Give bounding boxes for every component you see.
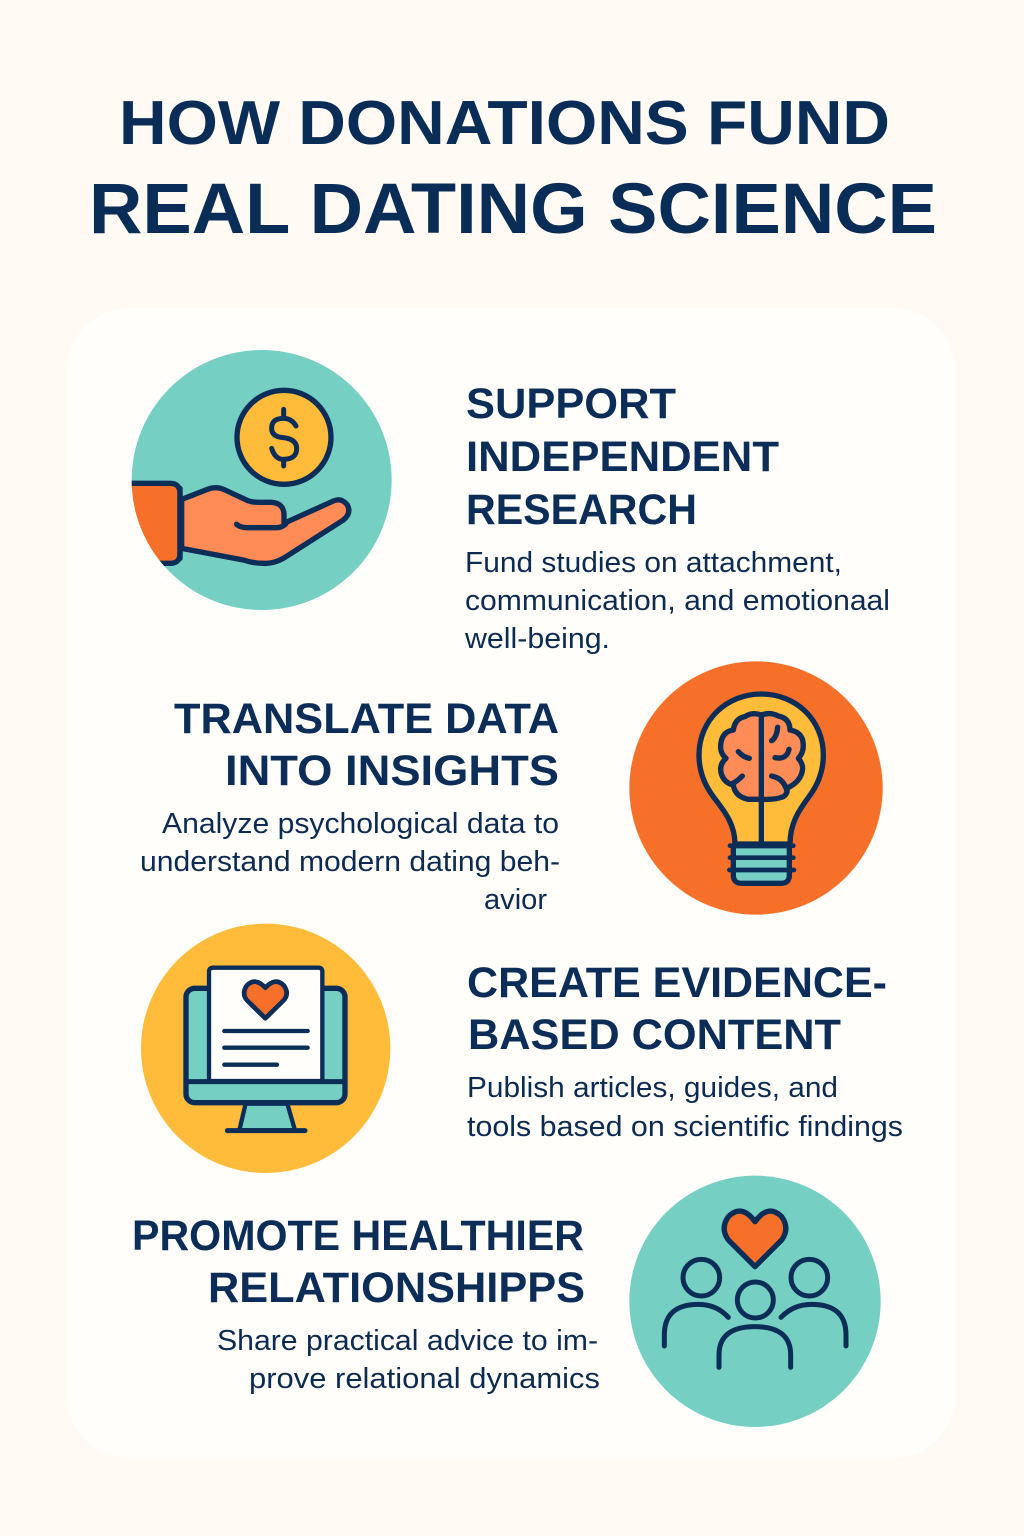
heading: create evidence-based content: CREATE EVIDENCE-	[467, 960, 887, 1007]
text: support independent research description	[464, 547, 890, 655]
heading: translate data into insights	[174, 696, 559, 795]
heading: support independent research: INDEPENDENT	[466, 434, 779, 481]
icon: three people with heart	[629, 1176, 881, 1427]
text: evidence-based content description: Publish articles, guides, and	[467, 1072, 838, 1104]
title: HOW DONATIONS FUND	[119, 88, 890, 158]
icon: light bulb with brain	[629, 661, 883, 915]
heading: support independent research	[466, 381, 779, 534]
text: translate data description: avior	[484, 884, 547, 916]
text: healthier relationships description: prove relational dynamics	[249, 1363, 600, 1395]
heading: support independent research: RESEARCH	[466, 487, 697, 534]
text: evidence-based content description: tools based on scientific findings	[467, 1111, 903, 1143]
heading: create evidence-based content	[467, 960, 887, 1059]
text: evidence-based content description	[467, 1072, 903, 1143]
text: healthier relationships description: Share practical advice to im-	[217, 1325, 598, 1357]
heading: create evidence-based content: BASED CONTENT	[468, 1012, 841, 1059]
heading: promote healthier relationships	[132, 1213, 585, 1312]
text: support independent research description: well-being.	[464, 623, 610, 655]
heading: promote healthier relationships: RELATIONSHIPPS	[208, 1265, 585, 1312]
heading: translate data into insights: TRANSLATE DATA	[174, 696, 559, 743]
icon: hand receiving a coin	[127, 350, 392, 610]
heading: promote healthier relationships: PROMOTE HEALTHIER	[132, 1213, 584, 1260]
text: support independent research description: Fund studies on attachment,	[465, 547, 842, 579]
title	[89, 88, 937, 249]
icon: monitor with article and heart	[141, 924, 390, 1173]
text: translate data description	[140, 808, 560, 916]
heading: support independent research: SUPPORT	[466, 381, 676, 428]
panel: main card	[132, 350, 902, 1427]
title: REAL DATING SCIENCE	[89, 170, 937, 249]
text: translate data description: understand modern dating beh-	[140, 846, 560, 878]
text: support independent research description: communication, and emotionaal	[465, 585, 890, 617]
text: healthier relationships description	[217, 1325, 600, 1395]
text: translate data description: Analyze psychological data to	[162, 808, 559, 840]
heading: translate data into insights: INTO INSIGHTS	[225, 748, 559, 795]
